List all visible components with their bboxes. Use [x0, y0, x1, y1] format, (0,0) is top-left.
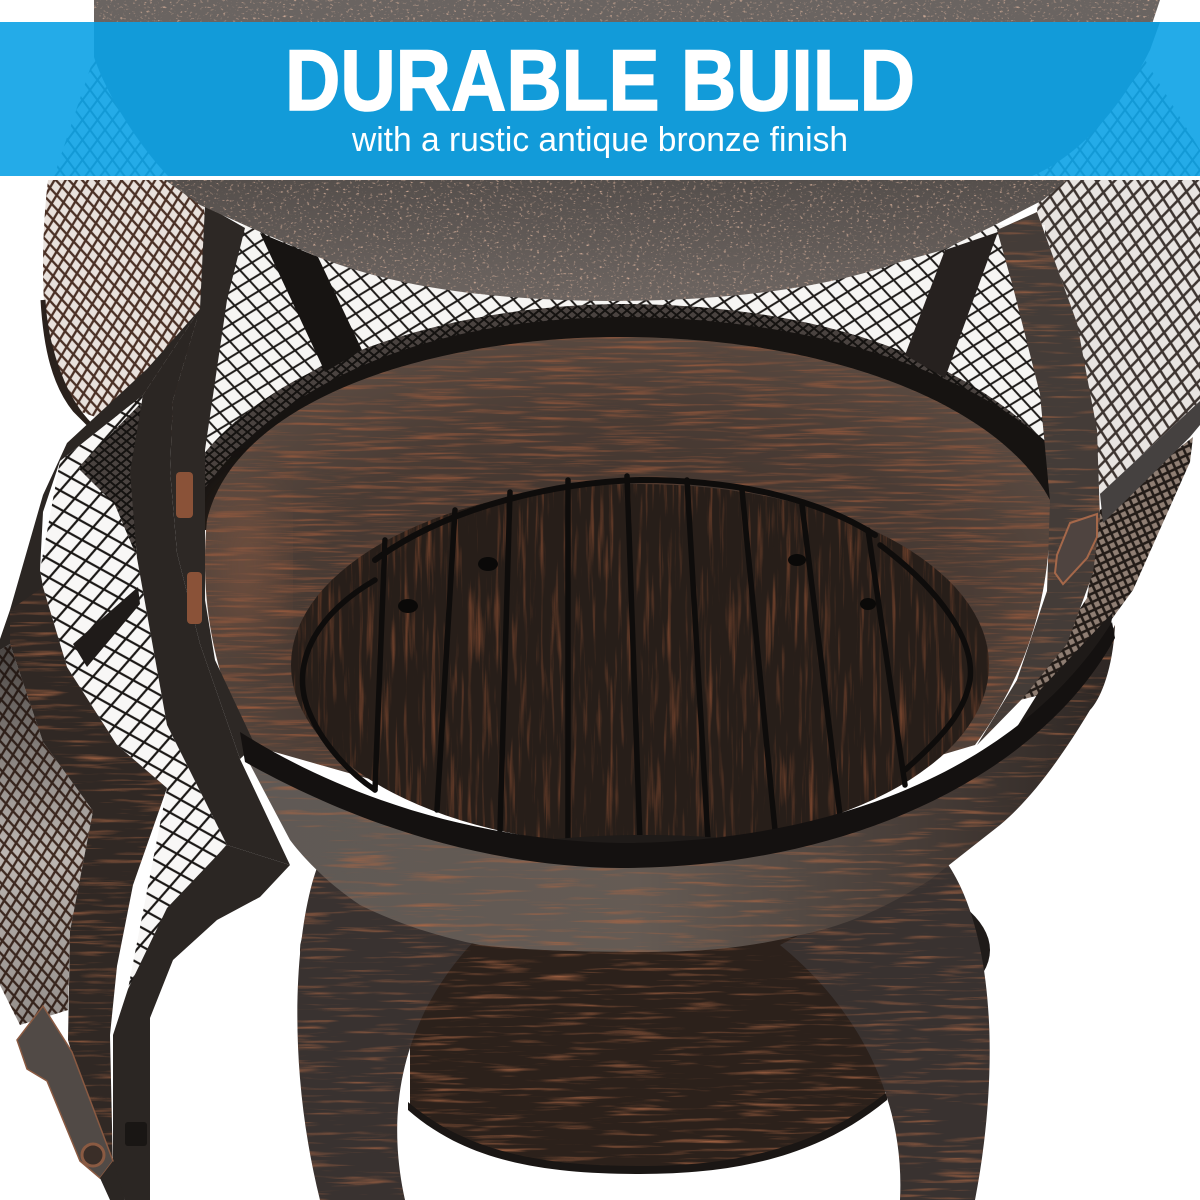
door hinges	[176, 472, 202, 624]
right horizontal ring	[1100, 401, 1200, 523]
inner left strut	[260, 233, 362, 372]
grate right hoop	[880, 545, 970, 770]
door top strip	[0, 309, 200, 650]
back base disc	[300, 835, 990, 1065]
banner background	[0, 22, 1200, 176]
grate floor	[291, 484, 989, 846]
door lower band	[113, 845, 290, 1200]
right base rim	[990, 612, 1113, 770]
door dark cross strut	[73, 587, 140, 667]
bowl exterior	[245, 625, 1115, 952]
grate screws	[398, 554, 876, 613]
door dark upper mesh	[78, 403, 141, 555]
door rivet	[82, 1144, 104, 1166]
bowl black rim	[240, 622, 1115, 868]
door lower trim	[100, 1161, 125, 1200]
back mesh right	[1037, 180, 1200, 494]
door white mesh	[40, 395, 227, 989]
lid underside	[165, 180, 1067, 301]
door copper mesh	[0, 644, 93, 1025]
cooking grate	[303, 476, 970, 842]
grate bars	[375, 476, 905, 842]
grate left hoop	[303, 580, 375, 790]
left arch band	[170, 205, 255, 759]
headline: DURABLE BUILD	[285, 33, 915, 129]
back black ring	[200, 317, 1050, 530]
banner mesh right	[1032, 60, 1200, 176]
subheadline: with a rustic antique bronze finish	[351, 121, 848, 159]
right arch band	[977, 212, 1100, 745]
banner lower rule	[0, 176, 1200, 180]
lid top above banner	[94, 0, 1160, 30]
right latch	[1055, 514, 1097, 584]
door clip	[125, 1122, 147, 1146]
banner mesh left	[54, 57, 168, 176]
right leg	[780, 860, 990, 1200]
shelf lower rim	[408, 1092, 887, 1174]
copper patch left of bowl	[220, 490, 276, 640]
inner right strut	[905, 232, 998, 378]
lower right mesh	[1020, 437, 1193, 700]
door main band	[130, 309, 290, 865]
grate top hoop	[375, 480, 875, 560]
banner centre over lid	[94, 22, 1160, 176]
door zigzag band	[10, 587, 167, 1172]
door latch	[17, 1006, 113, 1178]
left leg	[297, 860, 490, 1200]
back ledge mesh	[203, 304, 1047, 500]
back mesh centre	[205, 225, 1045, 470]
base shelf	[410, 930, 885, 1170]
back mesh left	[43, 180, 208, 455]
banner	[0, 22, 1200, 180]
bowl interior	[205, 337, 1050, 850]
door	[0, 309, 290, 1200]
